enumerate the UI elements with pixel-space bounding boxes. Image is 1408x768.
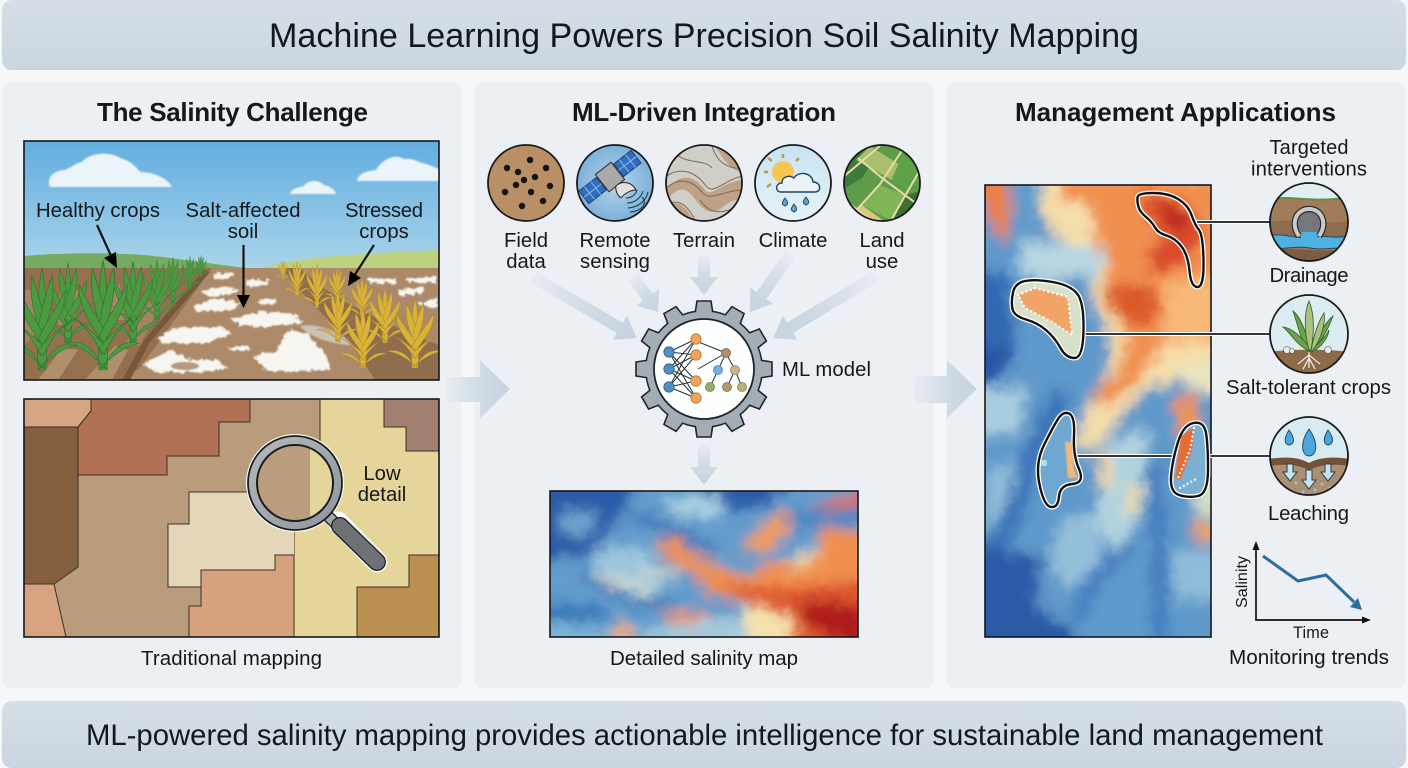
icon: terrain contours: [664, 145, 744, 252]
arrow: land use to model: [766, 265, 882, 350]
arrow: field data to model: [526, 265, 644, 350]
zone: salt-tolerant crops area: [1012, 280, 1084, 358]
arrow: integration to applications: [915, 360, 977, 418]
conclusion banner: ML-powered salinity mapping provides actionable intelligence for sustainable land management: [86, 719, 1323, 752]
soil: [130, 268, 438, 380]
axis label: Time: Time: [1293, 624, 1329, 642]
caption: Detailed salinity map: Detailed salinity map: [610, 647, 798, 670]
title banner: Machine Learning Powers Precision Soil Salinity Mapping: [269, 17, 1139, 55]
label: Stressed crops with arrow: [345, 200, 423, 286]
chart: large salinity map with zones: [984, 184, 1212, 638]
label: Field data: data: [506, 251, 546, 273]
icon: field data: [488, 145, 564, 273]
icon: salt-tolerant crops: [1226, 295, 1391, 399]
label: Climate: Climate: [759, 230, 827, 252]
panel: Management Applications: [946, 82, 1406, 688]
label: Healthy crops with arrow: [36, 200, 160, 268]
label: ML model: ML model: [782, 359, 871, 381]
label: Remote sensing: Remote: [579, 230, 651, 252]
label: Salt-affected soil with arrow: soil: [228, 221, 258, 243]
label: Remote sensing: [579, 230, 651, 273]
label: Targeted interventions: interventions: [1251, 158, 1367, 180]
healthy crops: [7, 255, 209, 370]
chart: monitoring trends line: [1233, 541, 1371, 642]
label: Salt-affected soil with arrow: [186, 200, 300, 308]
label: Stressed crops with arrow: Stressed: [345, 200, 423, 222]
arrow: model to map: [690, 445, 718, 485]
icon: climate weather: [755, 145, 831, 252]
icon: leaching: [1268, 417, 1350, 525]
zone: drainage area: [1137, 193, 1204, 287]
clouds: [49, 154, 439, 194]
heading: The Salinity Challenge: The Salinity Challenge: [97, 97, 368, 127]
label: Salt-tolerant crops: Salt-tolerant crops: [1226, 377, 1391, 399]
axis label: Salinity: Salinity: [1233, 555, 1251, 608]
label: Terrain: Terrain: [673, 230, 735, 252]
salt patches: [142, 273, 437, 373]
label: Salt-affected soil with arrow: Salt-affected: [186, 200, 300, 222]
icon: drainage: [1268, 183, 1350, 287]
label: Field data: [504, 230, 548, 273]
label: Land use: Land: [859, 230, 905, 252]
arrow: challenge to integration: [447, 360, 510, 418]
arrow: terrain to model: [690, 255, 718, 295]
caption: Monitoring trends: Monitoring trends: [1229, 646, 1389, 669]
illustration: crop field scene: [7, 141, 443, 380]
conclusion banner: [2, 701, 1406, 768]
stressed crops: [277, 260, 443, 368]
label: Low detail: detail: [358, 484, 406, 506]
label: Targeted interventions: [1251, 137, 1367, 180]
label: Low detail: [358, 463, 406, 506]
label: Remote sensing: sensing: [580, 251, 650, 273]
map: traditional low detail mapping: [24, 399, 439, 637]
label: Low detail: Low: [363, 463, 401, 485]
chart: detailed salinity heat map: [549, 490, 859, 638]
hills: [24, 253, 246, 268]
label: Healthy crops with arrow: Healthy crops: [36, 200, 160, 222]
connector lines: [1073, 222, 1272, 456]
label: Land use: use: [866, 251, 898, 273]
panel: The Salinity Challenge: [2, 82, 462, 688]
label: Targeted interventions: Targeted: [1270, 137, 1348, 159]
icon: remote sensing satellite: [577, 145, 653, 273]
icon: magnifying glass: [246, 434, 377, 562]
label: Stressed crops with arrow: crops: [359, 221, 409, 243]
panel: ML-Driven Integration: [474, 82, 934, 688]
caption: Traditional mapping: Traditional mapping: [141, 647, 322, 670]
arrow: remote sensing to model: [622, 269, 669, 320]
label: Field data: Field: [504, 230, 548, 252]
zone: leaching area right: [1171, 423, 1208, 497]
heading: Management Applications: Management Applications: [1015, 97, 1336, 127]
zone: leaching area left: [1038, 413, 1081, 507]
network diagram: [664, 334, 746, 403]
label: Land use: [859, 230, 905, 273]
icon: ML model gear: [636, 301, 772, 437]
title banner: [2, 0, 1406, 70]
heading: ML-Driven Integration: ML-Driven Integration: [572, 97, 836, 127]
label: Leaching: Leaching: [1268, 503, 1349, 525]
icon: land use fields: [842, 145, 925, 273]
arrow: climate to model: [739, 247, 802, 320]
label: Drainage: Drainage: [1270, 265, 1348, 287]
